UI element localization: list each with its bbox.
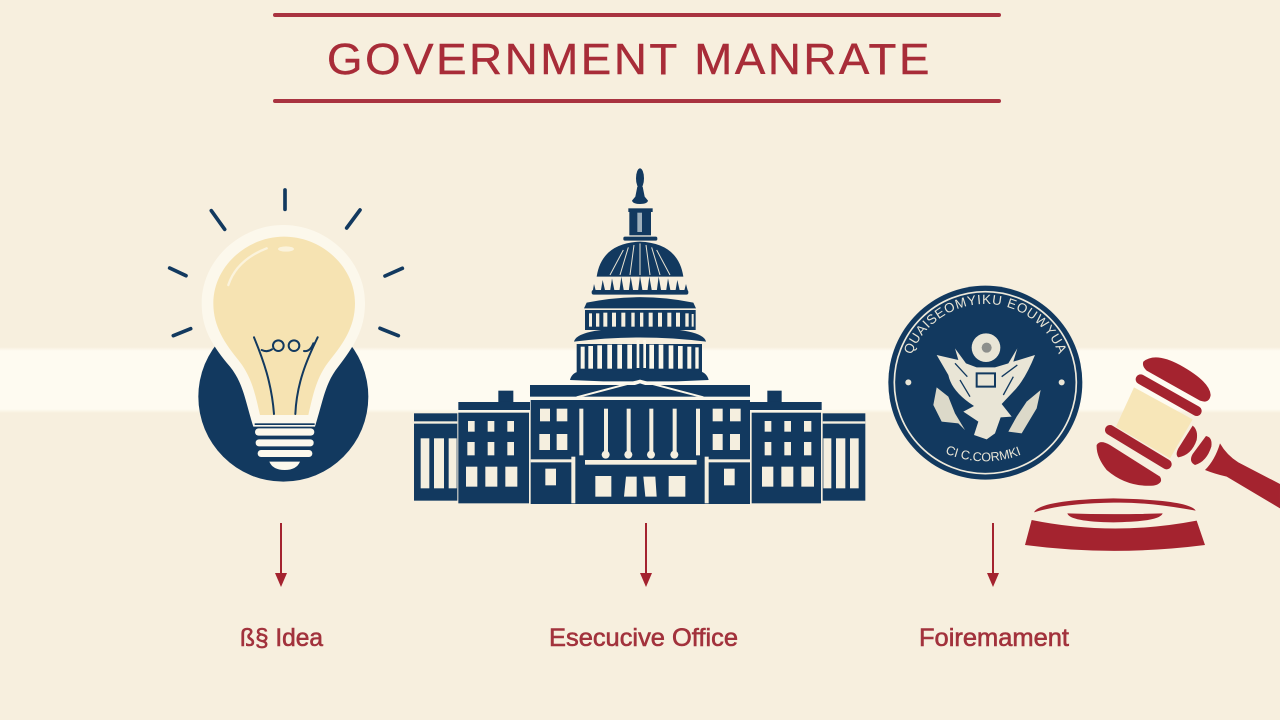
side wings	[414, 391, 865, 503]
central pediment	[530, 381, 750, 400]
seal bottom text: CI C.CORMKI	[946, 446, 1020, 462]
icon: government seal	[888, 286, 1082, 480]
dome finial and lantern	[623, 168, 657, 241]
icon: capitol building	[414, 168, 865, 504]
dome	[570, 242, 709, 381]
label: executive office: Esecucive Office	[549, 624, 738, 652]
title block: GOVERNMENT MANRATE	[327, 35, 932, 84]
central block with columns	[531, 400, 750, 504]
eagle emblem	[933, 333, 1041, 439]
light horizontal band	[0, 347, 1280, 413]
arrow: enforcement	[987, 523, 999, 587]
arrow: executive office	[640, 523, 652, 587]
seal top text: QUAISEOMYIKU EOUWYUA	[904, 294, 1066, 354]
title block	[273, 13, 1001, 103]
icon: gavel	[1025, 357, 1280, 551]
icon: light bulb	[170, 190, 402, 482]
label: enforcement: Foiremament	[919, 624, 1069, 652]
sound block	[1025, 498, 1205, 551]
gavel head	[1097, 357, 1280, 508]
label: idea: ß§ Idea	[240, 624, 323, 652]
arrow: idea	[275, 523, 287, 587]
